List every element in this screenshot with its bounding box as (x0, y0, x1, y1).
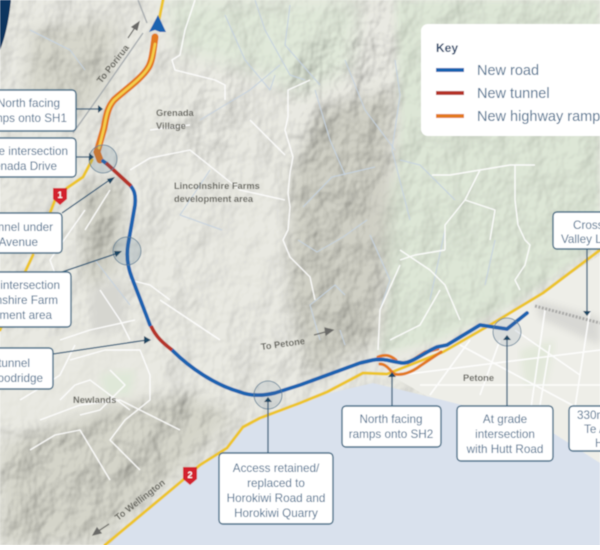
place labels: To Porirua (95, 42, 132, 85)
key: new tunnel (435, 86, 550, 99)
intersection circle: Lincolnshire Farm (113, 237, 141, 265)
new tunnel (106, 163, 172, 350)
key: new road: New road (477, 63, 539, 79)
callout: Hutt Road intersection: At grade (483, 413, 527, 426)
shield: SH1 (53, 188, 67, 205)
callout arrows (53, 105, 591, 453)
place labels: Village (156, 121, 186, 131)
direction arrows (93, 22, 333, 535)
place labels: development area (174, 194, 254, 204)
callout: Horokiwi access: Access retained/ (233, 462, 320, 475)
callout: Lincolnshire Farm intersection (0, 272, 71, 327)
callout: north facing ramps onto SH2: ramps onto SH2 (349, 428, 433, 441)
shield: SH2: 2 (187, 470, 193, 480)
key: new tunnel: New tunnel (477, 86, 550, 102)
callout: Horokiwi access: replaced to (247, 477, 305, 490)
place labels: Newlands (73, 395, 116, 405)
callout: 330m (569, 406, 600, 451)
intersection circle: Hutt Road (493, 318, 521, 346)
intersection circle: Horokiwi (254, 381, 282, 409)
place labels: Lincolnshire Farms (174, 181, 260, 191)
callout: tunnel under avenue (0, 213, 62, 253)
new road (103, 161, 527, 395)
place labels: To Petone (260, 336, 305, 352)
callout: Horokiwi access: Horokiwi Quarry (234, 507, 318, 520)
callout: north facing ramps onto SH2 (342, 406, 441, 447)
callout: Cross Valley Link (553, 212, 600, 249)
place labels: To Wellington (113, 477, 167, 523)
highway ramps SH1 (97, 37, 155, 160)
place labels (73, 42, 494, 523)
callout: Hutt Road intersection (457, 406, 553, 461)
highway ramps SH2 (378, 349, 441, 375)
panel: key (421, 24, 600, 136)
callout: Horokiwi access (219, 453, 333, 524)
callout: north facing ramps onto SH2: North facing (359, 413, 423, 426)
place labels: Petone (463, 373, 494, 383)
key heading: Key (436, 41, 458, 55)
intersection circle: Grenada Drive (89, 145, 117, 173)
key: new road (435, 64, 539, 76)
rivers (0, 0, 495, 345)
shield: SH1: 1 (57, 190, 63, 200)
arrow: north end of road (149, 15, 166, 32)
callout: Grenada Drive intersection (0, 138, 76, 177)
place labels: Grenada (156, 108, 195, 118)
sea (105, 383, 600, 548)
shield: SH2 (183, 467, 197, 485)
callout: Hutt Road intersection: intersection (475, 428, 535, 441)
callout: north facing ramps onto SH1 (0, 90, 76, 131)
rail line (535, 306, 600, 323)
callout: Hutt Road intersection: with Hutt Road (466, 443, 543, 456)
callout: tunnel near Woodridge (0, 348, 53, 389)
grey highway line (73, 0, 147, 133)
navy corner shape (0, 0, 11, 50)
callout: Horokiwi access: Horokiwi Road and (227, 492, 325, 505)
